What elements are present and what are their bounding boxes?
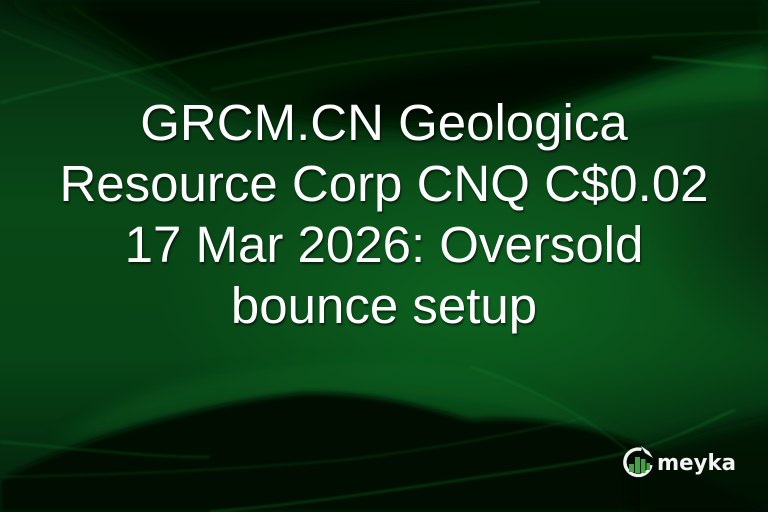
title: GRCM.CN Geologica	[140, 94, 628, 151]
title: 17 Mar 2026: Oversold	[125, 216, 643, 273]
icon: ring with bars	[625, 446, 653, 475]
wordmark: meyka	[657, 451, 736, 476]
top right green band	[490, 50, 768, 130]
bottom bright wave	[49, 362, 630, 445]
logo: meyka	[623, 446, 736, 478]
top dark lens shapes	[0, 0, 768, 131]
title	[59, 94, 709, 336]
light streaks	[0, 2, 540, 103]
title: bounce setup	[231, 277, 537, 334]
bottom dark lens	[0, 393, 768, 512]
title: Resource Corp CNQ C$0.02	[59, 155, 709, 212]
